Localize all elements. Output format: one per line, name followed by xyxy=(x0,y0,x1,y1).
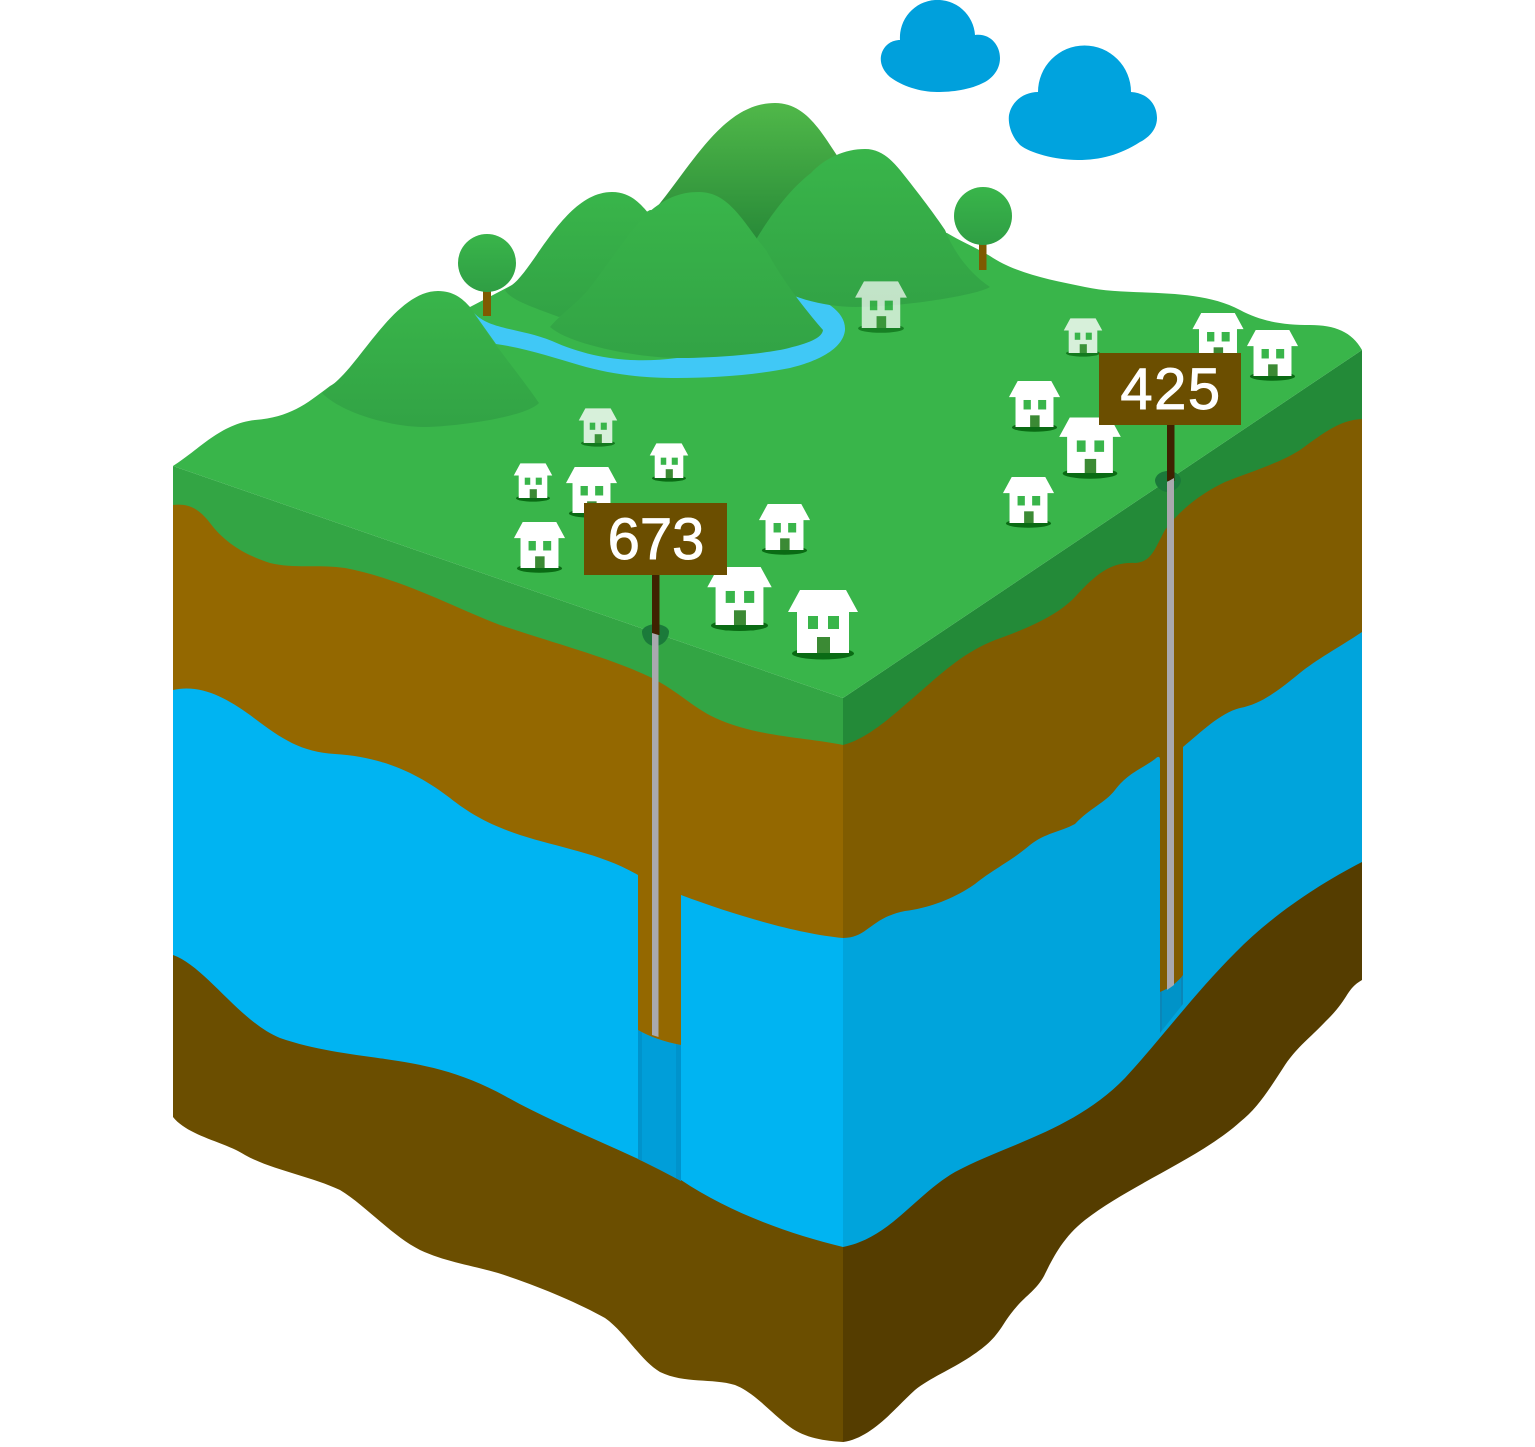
well: right, with sign 425: 425 xyxy=(1120,357,1222,422)
right face: aquifer water layer xyxy=(843,600,1362,1247)
right face: upper soil layer xyxy=(843,360,1362,992)
right face: grass bank xyxy=(843,350,1362,745)
hill: back right xyxy=(757,149,990,307)
left face: deep rock layer xyxy=(173,900,843,1442)
top surface: grass xyxy=(173,210,1362,698)
right face: deep rock layer xyxy=(843,820,1362,1442)
tree: right xyxy=(954,187,1012,270)
hill: left foreground xyxy=(322,291,539,427)
house: near back-right hill xyxy=(855,281,907,333)
houses: left village xyxy=(514,408,858,660)
well: left, with sign 673 xyxy=(584,503,727,1037)
left face: aquifer water layer xyxy=(173,650,843,1247)
left face: grass bank xyxy=(173,466,843,745)
hill: front centre xyxy=(550,192,823,358)
hill: back left xyxy=(505,192,650,317)
right well shaft in aquifer xyxy=(1160,975,1183,1033)
left well shaft in aquifer xyxy=(638,1030,681,1181)
river xyxy=(474,291,845,378)
cloud: small xyxy=(881,0,1000,92)
houses: right village xyxy=(1003,313,1298,528)
left face: upper soil layer xyxy=(173,480,843,1045)
cloud: large xyxy=(1009,46,1157,160)
well: left, with sign 673: 673 xyxy=(608,507,704,572)
hill: back peak xyxy=(657,103,840,240)
tree: left xyxy=(458,234,516,316)
well: right, with sign 425 xyxy=(1099,353,1241,990)
